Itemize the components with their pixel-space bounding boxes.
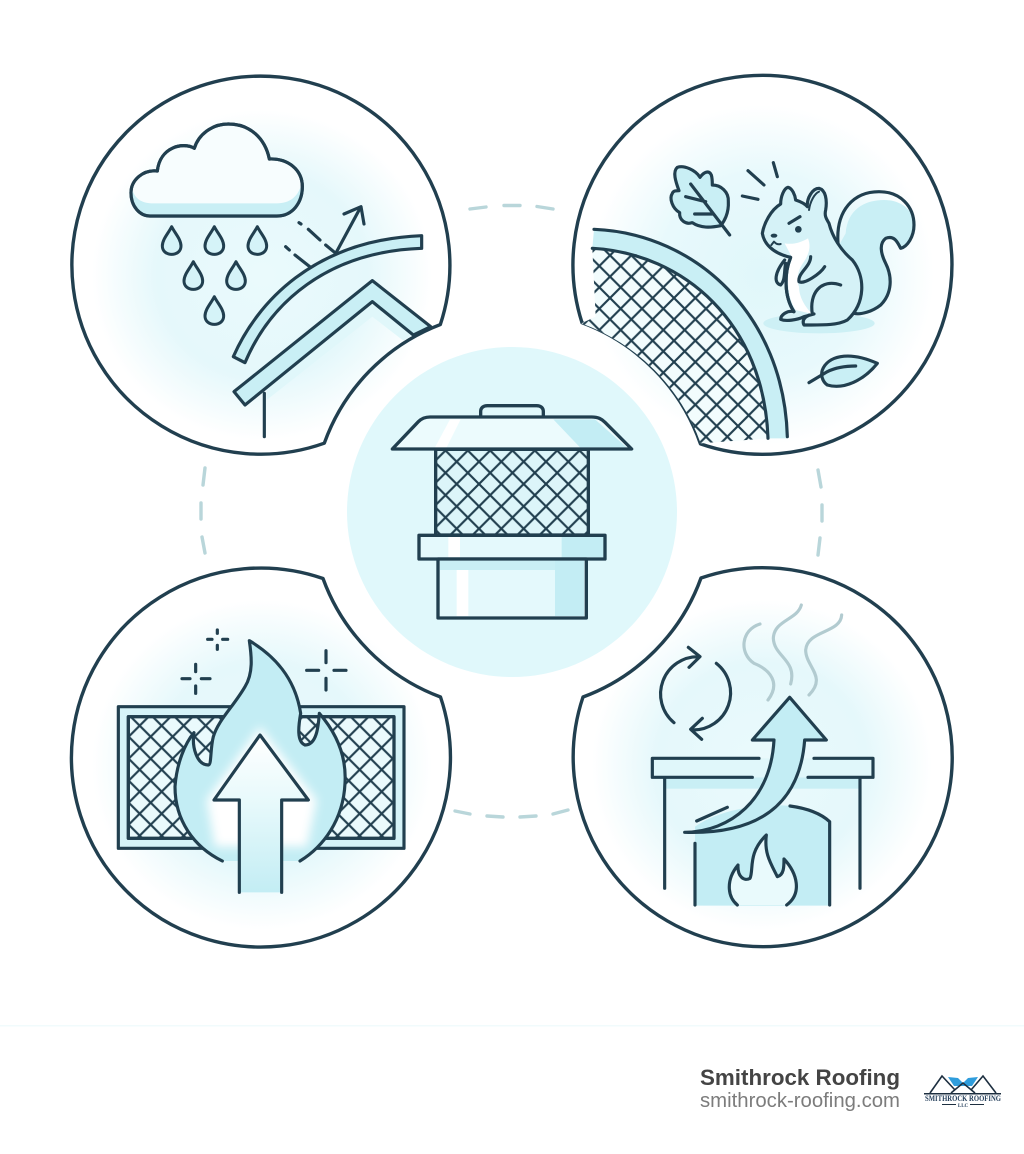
footer brand text: smithrock-roofing.com [700, 1090, 900, 1112]
panel outline: draft [573, 568, 952, 947]
arrow: rising draft [685, 697, 826, 832]
icon: roof [234, 281, 431, 437]
logo: Smithrock Roofing: SMITHROCK ROOFING [925, 1094, 1001, 1103]
cap lid [392, 417, 632, 449]
icon: sparks [182, 630, 346, 693]
panel: spark and flame arrest [71, 568, 450, 947]
arrow: upward draft [214, 735, 308, 892]
footer divider [0, 1025, 1024, 1026]
icon: smoke [744, 605, 842, 700]
icon: mesh frame [118, 707, 404, 848]
logo: Smithrock Roofing: LLC [958, 1104, 969, 1109]
panel: weather protection [72, 76, 450, 454]
panel outline: pests [573, 75, 952, 454]
icon: circular arrows [661, 647, 731, 739]
icon: fire [729, 835, 796, 905]
logo: Smithrock Roofing [924, 1076, 1001, 1109]
icon: raindrops [162, 227, 267, 324]
panel: central chimney cap [347, 347, 677, 677]
icon: squirrel [762, 187, 914, 333]
panel: improved draft [573, 568, 952, 947]
panel outline: flame [71, 568, 450, 947]
cap handle [481, 406, 543, 416]
icon: small leaf [809, 356, 877, 386]
panel: pest and debris screen [573, 75, 952, 454]
icon: chimney cap [392, 406, 632, 618]
icon: oak leaf [671, 167, 730, 235]
icon: curved mesh screen [581, 229, 787, 443]
collar band [419, 535, 605, 559]
icon: firebox [695, 805, 830, 906]
base flue [438, 559, 586, 618]
icon: rain cloud [131, 124, 302, 216]
spark mesh [436, 449, 588, 535]
icon: flame [175, 641, 345, 861]
icon: mantel [652, 758, 873, 888]
icon: curved deflector shield [233, 236, 422, 363]
panel outline: weather [72, 76, 450, 454]
icon: fireplace scene [652, 605, 873, 906]
icon: alert marks [742, 163, 777, 199]
connecting dashed ring [201, 206, 822, 817]
arrow: deflected rain [286, 207, 364, 267]
footer brand text [700, 1065, 900, 1112]
icon: weather scene [131, 124, 431, 437]
icon: pest scene [581, 163, 914, 443]
footer brand text: Smithrock Roofing [700, 1065, 900, 1090]
badge circle [347, 347, 677, 677]
icon: flame scene [118, 630, 404, 892]
